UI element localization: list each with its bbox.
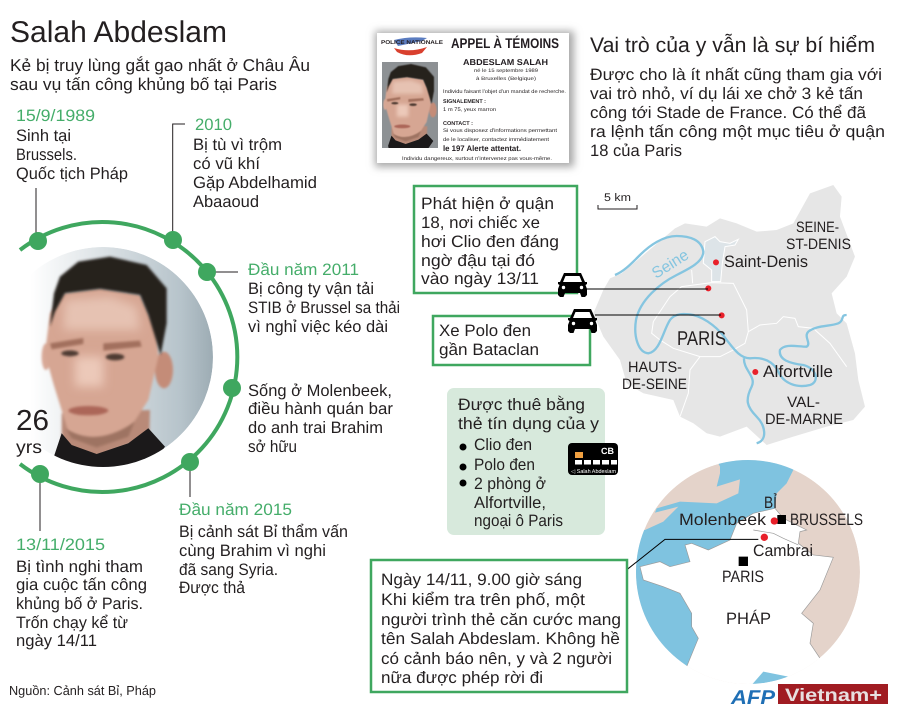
neighbouring land and sea: [636, 460, 860, 684]
callout: Clio: ngờ đậu tại đó: [421, 252, 535, 270]
event: early 2011: vì nghỉ việc kéo dài: [248, 318, 388, 336]
map: Paris region: [593, 185, 865, 445]
title: Salah Abdeslam: [10, 16, 227, 49]
place labels: Saint-Denis: [724, 253, 808, 271]
event: early 2015: Bị cảnh sát Bỉ thẩm vấn: [179, 523, 348, 541]
connector lines: [36, 124, 238, 531]
poster text: SIGNALEMENT :: [443, 99, 486, 105]
poster text: à Bruxelles (Belgique): [476, 76, 536, 82]
locator labels: BỈ: [764, 493, 777, 512]
leader line: [627, 539, 758, 569]
city squares: [739, 515, 786, 566]
scale bar: 5 km: [604, 192, 631, 204]
locator labels: Molenbeek: [679, 511, 767, 529]
callout: 14/11 checkpoint: tên Salah Abdeslam. Không hề: [381, 630, 620, 648]
icon: credit card: CB: [601, 446, 614, 456]
event: 15/9/1989: 15/9/1989: [16, 107, 95, 125]
poster text: [402, 35, 566, 162]
locator labels: BRUSSELS: [790, 511, 863, 529]
location dots: [705, 259, 758, 375]
poster text: Si vous disposez d'informations permettant: [443, 128, 558, 134]
leader lines: [586, 289, 721, 315]
Saint-Denis area: [703, 237, 738, 282]
poster photo: [382, 62, 438, 152]
callout: 14/11 checkpoint: nữa được phép rời đi: [381, 669, 543, 687]
callout: Clio: [414, 186, 577, 293]
event: early 2015: cùng Brahim vì nghi: [179, 542, 326, 560]
Belgium border: [753, 530, 798, 545]
locator labels: Cambrai: [753, 542, 813, 560]
poster logo: [381, 37, 443, 55]
place labels: SEINE-: [796, 219, 839, 236]
event: 13/11/2015: Trốn chạy kể từ: [16, 614, 128, 632]
icon: car Polo: [568, 309, 597, 333]
place labels: PARIS: [677, 328, 726, 350]
locator labels: PHÁP: [726, 609, 771, 628]
age: [16, 405, 49, 457]
place labels: DE-MARNE: [765, 411, 843, 428]
logo: AFP Vietnam+: [730, 684, 888, 709]
event: 2010: Abaaoud: [193, 193, 259, 211]
age: 26: [16, 405, 49, 437]
place labels: HAUTS-: [628, 359, 682, 376]
callout: 14/11 checkpoint: Ngày 14/11, 9.00 giờ sáng: [381, 571, 582, 589]
place labels: VAL-: [787, 394, 820, 411]
role text: [590, 66, 885, 160]
poster text: né le 15 septembre 1989: [474, 68, 538, 74]
role text: ra lệnh tấn công một mục tiêu ở quận: [590, 123, 885, 141]
event: early 2011: STIB ở Brussel sa thải: [248, 299, 400, 317]
callout: Polo: Xe Polo đen: [439, 322, 531, 340]
event: 15/9/1989: [16, 107, 128, 183]
red dots: [771, 517, 778, 525]
event: 13/11/2015: ngày 14/11: [16, 632, 97, 650]
place labels: ST-DENIS: [786, 236, 851, 253]
callout: Clio: Phát hiện ở quận: [421, 195, 554, 213]
callout: 14/11 checkpoint: người trình thẻ căn cước mang: [381, 611, 621, 629]
event: early 2011: [248, 261, 400, 336]
event: 2010: Gặp Abdelhamid: [193, 174, 317, 192]
callout: Polo: gần Bataclan: [439, 341, 539, 359]
poster text: Individu dangereux, surtout n'intervenez pas vous-même.: [402, 156, 552, 162]
callout: 14/11 checkpoint: [371, 560, 627, 692]
poster text: le 197 Alerte attentat.: [443, 144, 521, 153]
callout: Clio: 18, nơi chiếc xe: [421, 214, 540, 232]
event: 2010: có vũ khí: [193, 155, 260, 173]
event: 15/9/1989: Quốc tịch Pháp: [16, 165, 128, 183]
event: 13/11/2015: 13/11/2015: [16, 536, 105, 554]
poster text: 1 m 75, yeux marron: [443, 107, 496, 113]
event: 2010: 2010: [195, 116, 232, 134]
event: Molenbeek: sở hữu: [248, 438, 297, 456]
poster text: Individu faisant l'objet d'un mandat de recherche.: [443, 89, 566, 95]
logo: AFP Vietnam+: Vietnam+: [785, 685, 882, 705]
green ring: [20, 222, 237, 492]
panel: credit card rentals: 2 phòng ở: [474, 475, 546, 493]
age: yrs: [16, 437, 42, 457]
event: 15/9/1989: Sinh tại: [16, 127, 71, 145]
icon: credit card: ◁ Salah Abdeslam: [571, 469, 616, 475]
subtitle: sau vụ tấn công khủng bố tại Paris: [10, 75, 277, 94]
source: Nguồn: Cảnh sát Bỉ, Pháp: [9, 683, 156, 698]
wanted poster: [375, 31, 574, 167]
role text: công tới Stade de France. Có thể đã: [590, 104, 867, 122]
panel: credit card rentals: ngoại ô Paris: [474, 512, 563, 530]
callout: 14/11 checkpoint: có cảnh báo nên, y và 2 người: [381, 650, 612, 668]
callout: Clio: vào ngày 13/11: [421, 270, 539, 288]
region shape: [593, 185, 865, 445]
poster text: APPEL À TÉMOINS: [451, 35, 559, 51]
poster text: ABDESLAM SALAH: [463, 57, 548, 67]
callout: Polo: [433, 316, 590, 365]
event: 13/11/2015: Bị tình nghi tham: [16, 558, 143, 576]
panel: credit card rentals: Alfortville,: [474, 494, 546, 512]
panel: credit card rentals: Được thuê bằng: [458, 395, 585, 414]
scale bar: [598, 192, 637, 209]
France and Belgium: [640, 508, 833, 690]
event: Molenbeek: do anh trai Brahim: [248, 419, 383, 437]
event: early 2015: [179, 501, 348, 597]
event: 2010: Bị tù vì trộm: [193, 136, 282, 154]
place labels: [622, 219, 851, 428]
callout: 14/11 checkpoint: Khi kiểm tra trên phố, một: [381, 591, 585, 609]
Mediterranean: [752, 672, 788, 685]
event: early 2015: đã sang Syria.: [179, 561, 278, 579]
panel: credit card rentals: Clio đen: [474, 436, 532, 454]
event: Molenbeek: điều hành quán bar: [248, 400, 394, 418]
subtitle: Kẻ bị truy lùng gắt gao nhất ở Châu Âu: [10, 56, 310, 75]
district borders: [652, 270, 847, 417]
Seine river: [615, 236, 847, 443]
event: Molenbeek: [248, 382, 394, 456]
panel: credit card rentals: Polo đen: [474, 456, 535, 474]
poster text: de le localiser, contactez immédiatement: [443, 137, 550, 143]
poster text: CONTACT :: [443, 121, 473, 127]
locator labels: PARIS: [722, 568, 764, 586]
timeline dots: [29, 231, 241, 483]
event: 15/9/1989: Brussels.: [16, 146, 77, 164]
icon: car Clio: [558, 273, 587, 297]
place labels: Alfortville: [763, 363, 833, 381]
subtitle: [10, 56, 310, 94]
icon: credit card: [568, 443, 618, 475]
heading: role: Vai trò của y vẫn là sự bí hiểm: [590, 33, 875, 57]
logo: AFP Vietnam+: AFP: [730, 687, 776, 709]
panel: credit card rentals: [447, 388, 618, 535]
event: early 2015: Đầu năm 2015: [179, 501, 292, 519]
event: 13/11/2015: [16, 536, 147, 650]
event: early 2011: Đầu năm 2011: [248, 261, 359, 279]
portrait photo: [40, 247, 213, 467]
event: 2010: [193, 116, 317, 211]
event: early 2015: Được thả: [179, 579, 246, 597]
role text: vai trò nhỏ, ví dụ lái xe chở 3 kẻ tấn: [590, 85, 863, 103]
place labels: DE-SEINE: [622, 376, 687, 393]
locator map: France and Belgium: [620, 457, 863, 690]
event: early 2011: Bị công ty vận tải: [248, 280, 374, 298]
timeline ring with portrait: [0, 124, 241, 531]
callout: Clio: hơi Clio đen đáng: [421, 233, 559, 251]
event: 13/11/2015: gia cuộc tấn công: [16, 576, 147, 594]
event: 13/11/2015: khủng bố ở Paris.: [16, 595, 143, 613]
river label: Seine: [649, 247, 692, 282]
locator labels: [679, 493, 863, 628]
panel: credit card rentals: thẻ tín dụng của y: [458, 415, 600, 433]
event: Molenbeek: Sống ở Molenbeek,: [248, 382, 392, 400]
poster logo: POLICE NATIONALE: [381, 40, 443, 46]
role text: Được cho là ít nhất cũng tham gia với: [590, 66, 882, 84]
role text: 18 của Paris: [590, 142, 682, 160]
